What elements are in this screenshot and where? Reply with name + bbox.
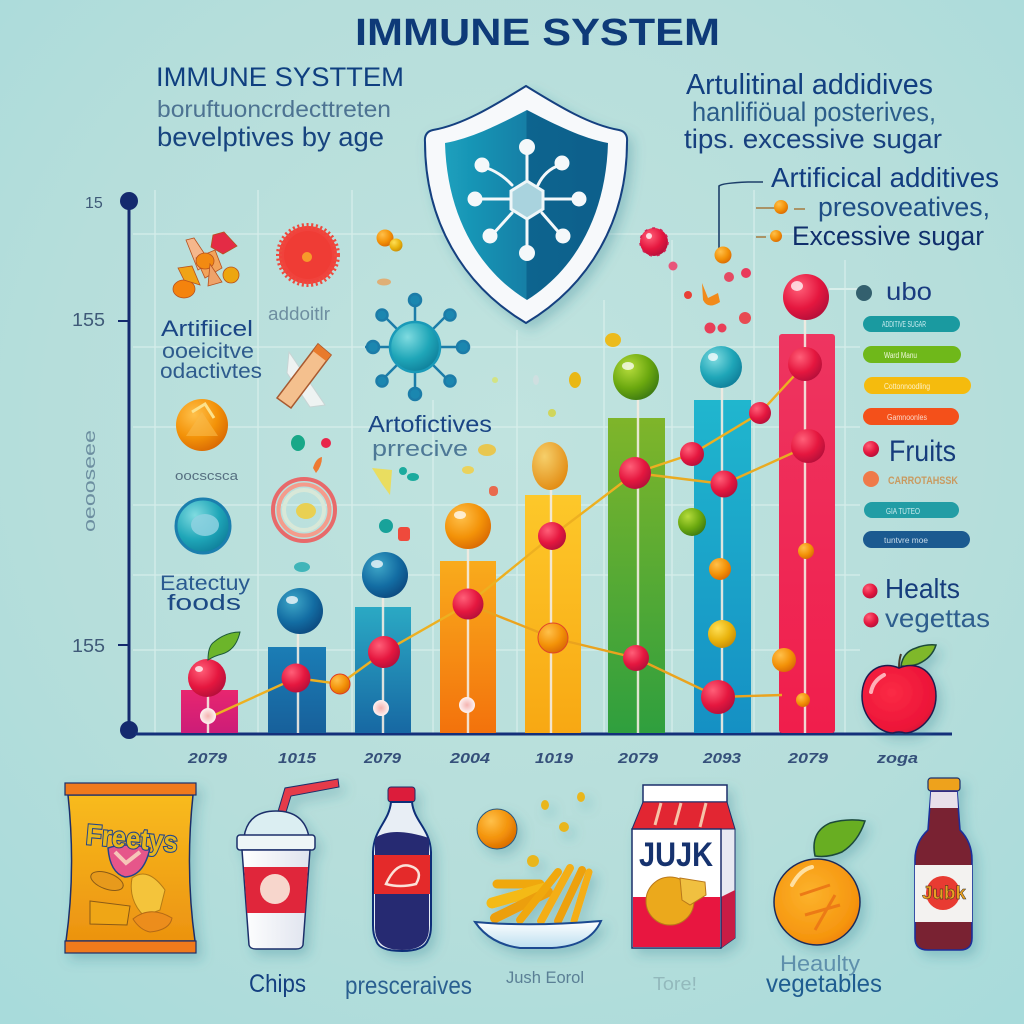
text block: additives callout [771, 162, 999, 251]
stems [208, 318, 805, 733]
text: artificial additives label: odactivtes [160, 360, 262, 383]
icon: red apple [862, 645, 936, 733]
x axis labels: zoga [876, 750, 918, 767]
text: artificial preservative label: Artofictives [368, 411, 492, 437]
icon: soda cup [237, 779, 339, 949]
bars [181, 334, 835, 733]
y axis: 155 [72, 310, 105, 330]
icon: teal ball [176, 499, 230, 553]
x axis labels [187, 750, 918, 767]
y axis: oeooseee [80, 430, 99, 532]
heading: left subtitle: boruftuoncrdecttreten [157, 96, 391, 122]
x axis labels: 2093 [702, 750, 742, 767]
icon: small orange blob [376, 230, 402, 286]
y axis: 15 [85, 195, 103, 212]
icon: cola bottle [373, 787, 431, 951]
bottle label: Jubk [922, 883, 967, 903]
legend bar: yellow [864, 377, 971, 394]
heading: left subtitle [156, 62, 404, 152]
label: healthy vegetables: vegetables [766, 970, 882, 998]
legend bar: green: Ward Manu [884, 351, 917, 360]
icon: red spiky germ [279, 226, 337, 284]
y axis [72, 192, 138, 739]
label: healthy vegetables [766, 951, 882, 998]
x axis labels: 2004 [449, 750, 491, 767]
text: unhealthy foods label [160, 572, 251, 615]
icon: orange fruit [774, 820, 865, 945]
x axis labels: 1015 [278, 750, 317, 767]
icon: pink virus [640, 228, 678, 270]
text: artificial preservative label [368, 411, 492, 461]
icon: milk carton [632, 785, 735, 948]
legend bar: teal 2 [864, 502, 959, 518]
text block: top right [684, 69, 942, 154]
label: chips: Chips [249, 970, 306, 998]
title: IMMUNE SYSTEM [355, 12, 720, 54]
legend [856, 278, 990, 633]
legend bar: teal [863, 316, 960, 332]
text: artificial additives label: ooeicitve [162, 340, 254, 363]
text block: additives callout: Excessive sugar [792, 221, 984, 251]
label: junk food: Jush Eorol [506, 968, 584, 987]
icon: ring [273, 479, 335, 541]
icon: fries plate [475, 792, 601, 948]
text: additive faded label: addoitlr [268, 304, 330, 324]
legend: vegetables: vegettas [885, 603, 990, 633]
chip bag logo [85, 819, 179, 877]
legend bar: green [863, 346, 961, 363]
icon: blue virus [365, 294, 469, 400]
text block: top right: hanlifiöual posterives, [692, 97, 936, 127]
legend bar: red: Gamnoonles [887, 413, 927, 422]
legend: fruits: Fruits [889, 435, 956, 468]
legend bar: navy [863, 531, 970, 548]
x axis [135, 732, 952, 736]
legend header [856, 278, 932, 306]
legend bar: navy: tuntvre moe [884, 536, 929, 545]
text block: additives callout: Artificical additives [771, 162, 999, 193]
legend: fruits [863, 435, 956, 468]
x axis labels: 2079 [363, 750, 402, 767]
legend bar: teal 2: GIA TUTEO [886, 507, 920, 516]
x axis labels: 2079 [787, 750, 829, 767]
chip bag logo: Freetys [85, 819, 179, 859]
legend: faded row: CARROTAHSSK [888, 475, 958, 487]
heading: left subtitle: bevelptives by age [157, 122, 384, 152]
icon: immune shield [425, 86, 627, 323]
text: unhealthy foods label: Eatectuy [160, 572, 251, 595]
x axis labels: 2079 [617, 750, 659, 767]
heading: left subtitle: IMMUNE SYSTTEM [156, 62, 404, 92]
label: healthy vegetables: Heaulty [780, 951, 860, 976]
x axis labels: 1019 [535, 750, 574, 767]
bar chart [181, 274, 835, 733]
callout connectors [714, 182, 805, 264]
legend header: ubo [886, 278, 932, 306]
carton label: JUJK [639, 836, 713, 874]
legend bar: teal: ADDITIVE SUGAR [882, 320, 926, 329]
text: artificial additives label: Artifiicel [161, 316, 253, 341]
legend: faded row [863, 471, 958, 487]
connector to legend [829, 288, 862, 290]
trend lines [208, 364, 808, 718]
text block: top right: Artulitinal addidives [686, 69, 933, 101]
scattered particles [291, 268, 751, 572]
y axis: 155 [72, 636, 105, 656]
icon: shield cell [469, 140, 585, 260]
legend bar: yellow: Cottonnoodling [884, 382, 930, 391]
line markers [200, 347, 825, 724]
top markers [188, 274, 829, 697]
icon: additive cluster [173, 232, 239, 298]
legend: health: Healts [885, 573, 960, 604]
text: artificial additives label [160, 316, 262, 383]
x axis labels: 2079 [187, 750, 228, 767]
icon: orange ball [176, 399, 228, 451]
text: faded label under orange ball: oocscsca [175, 468, 239, 483]
text: unhealthy foods label: foods [167, 590, 241, 615]
label: preservatives: presceraives [345, 972, 472, 1000]
icon: tilted chip tube [277, 344, 331, 408]
label: faded: Tore! [653, 974, 697, 994]
legend bar: red [863, 408, 959, 425]
text: artificial preservative label: prrecive [372, 436, 468, 461]
icon: chip bag [65, 783, 196, 953]
text block: additives callout: presoveatives, [818, 192, 990, 222]
text block: top right: tips. excessive sugar [684, 124, 942, 154]
icon: sauce bottle [915, 778, 972, 950]
